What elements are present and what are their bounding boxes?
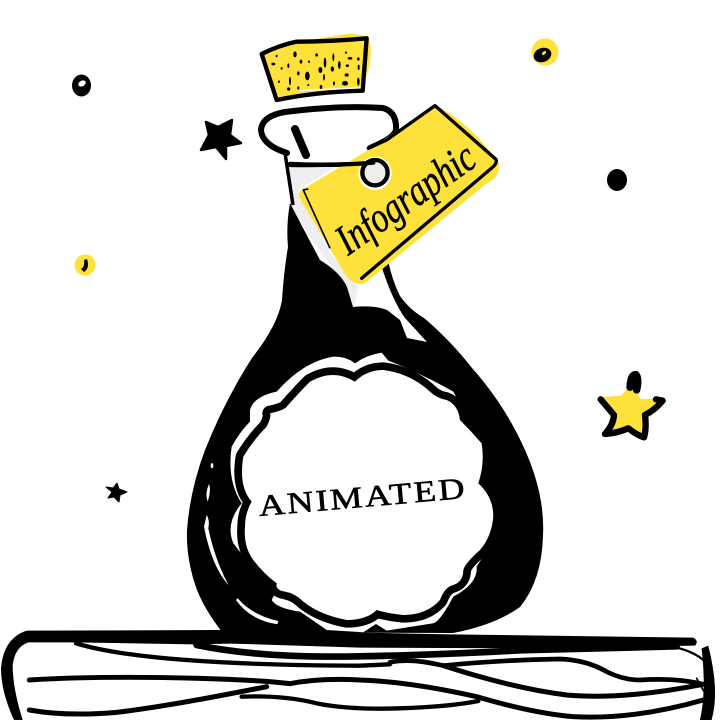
- icon: black dot right: [607, 169, 627, 191]
- icon: black ring dot top left: [72, 74, 91, 96]
- icon: yellow ring dot top right: [532, 38, 558, 66]
- icon: large black star: [201, 120, 241, 159]
- label text: ANIMATED: [257, 472, 468, 523]
- bottle highlights: [204, 463, 278, 624]
- bottle neck and rim: [261, 107, 396, 308]
- tag hole with string: [290, 157, 392, 190]
- cork stopper: [262, 33, 371, 100]
- label: scalloped white plaque: [230, 353, 500, 632]
- icon: small black star: [106, 483, 127, 502]
- tag text: Infographic: [326, 134, 485, 265]
- wooden table: [1, 630, 715, 720]
- tag yellow shape: [299, 105, 499, 284]
- bottle body with dark liquid: [187, 203, 543, 633]
- icon: yellow star: [600, 375, 663, 437]
- tag left edge: [303, 189, 330, 248]
- icon: yellow dot left: [74, 254, 96, 276]
- hang tag: [290, 105, 499, 284]
- tag outline: [362, 106, 496, 278]
